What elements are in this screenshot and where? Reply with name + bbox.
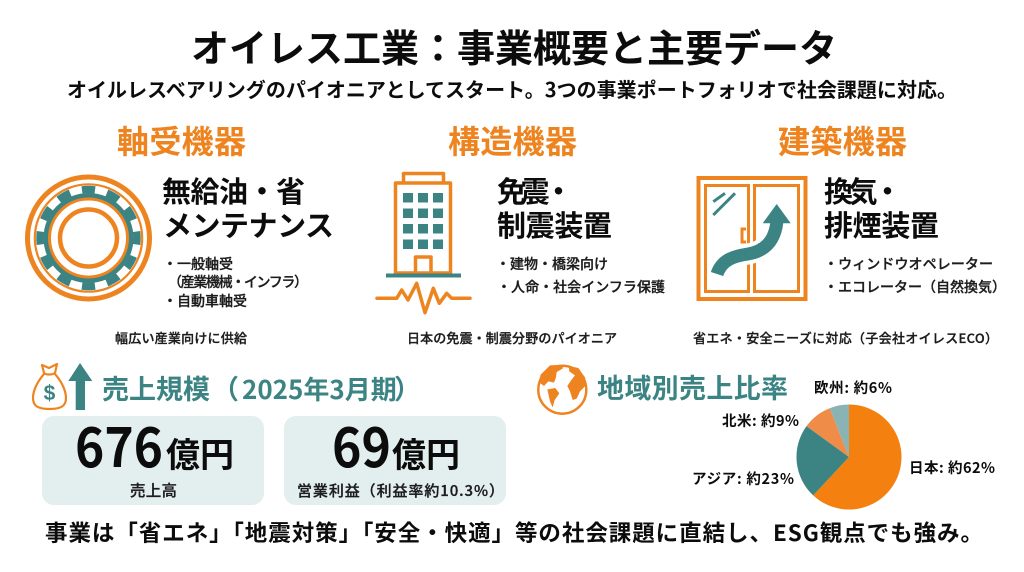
label: Europe: 欧州: 約6% bbox=[814, 377, 892, 398]
icon: money bag and up arrow: $ bbox=[44, 382, 56, 405]
subheading: oil-free, low maintenance: 無給油・省 bbox=[162, 169, 305, 211]
label: North America: 北米: 約9% bbox=[722, 410, 799, 431]
heading: sales by region: 地域別売上比率 bbox=[597, 367, 788, 406]
heading: bearing equipment: 軸受機器 bbox=[117, 117, 246, 163]
value: revenue: 676 bbox=[75, 404, 163, 483]
bullet list bbox=[163, 254, 308, 311]
value: operating profit: 億円 bbox=[392, 428, 460, 477]
pie chart bbox=[796, 404, 902, 510]
icon: money bag and up arrow bbox=[33, 363, 92, 410]
label: Japan: 日本: 約62% bbox=[909, 457, 995, 478]
value: operating profit: 69 bbox=[332, 404, 391, 483]
heading: structural equipment: 構造機器 bbox=[448, 117, 577, 163]
caption: 幅広い産業向けに供給 bbox=[115, 328, 247, 347]
panel: bearing equipment bbox=[28, 117, 334, 347]
icon: window with airflow arrow bbox=[698, 178, 806, 299]
bullet list: （産業機械・インフラ） bbox=[168, 272, 308, 292]
panel: structural equipment bbox=[377, 117, 665, 347]
subtitle: オイルレスベアリングのパイオニアとしてスタート。3つの事業ポートフォリオで社会課題に対応。 bbox=[67, 74, 957, 103]
panel: bearing equipment: メンテナンス bbox=[163, 203, 334, 245]
label: revenue: 売上高 bbox=[130, 479, 177, 501]
bullet list: ・エコレーター（自然換気） bbox=[824, 277, 1006, 297]
heading: sales scale: （ bbox=[212, 368, 239, 407]
value: operating profit bbox=[332, 404, 460, 483]
heading: sales scale: 2025年3月期 bbox=[242, 370, 397, 407]
bullet list: ・人命・社会インフラ保護 bbox=[497, 277, 665, 297]
icon: building on seismic wave bbox=[377, 174, 470, 313]
conclusion text: 事業は「省エネ」「地震対策」「安全・快適」等の社会課題に直結し、ESG観点でも強み。 bbox=[45, 516, 983, 548]
card: operating profit bbox=[284, 404, 506, 505]
icon: globe bbox=[538, 365, 587, 414]
label: operating profit: 営業利益（利益率約10.3%） bbox=[297, 480, 504, 501]
heading: sales scale: ） bbox=[394, 368, 421, 407]
card: revenue bbox=[42, 404, 264, 505]
bullet list: ・自動車軸受 bbox=[163, 291, 247, 311]
label: Asia: アジア: 約23% bbox=[692, 468, 794, 489]
panel: architectural equipment: 排煙装置 bbox=[824, 203, 939, 245]
caption: 日本の免震・制震分野のパイオニア bbox=[407, 328, 617, 347]
icon: bearing gear bbox=[28, 177, 150, 299]
heading: architectural equipment: 建築機器 bbox=[778, 117, 907, 163]
subheading: seismic isolation and control devices: 免震・ bbox=[497, 169, 573, 211]
caption: 省エネ・安全ニーズに対応（子会社オイレスECO） bbox=[693, 328, 998, 347]
panel: structural equipment: 制震装置 bbox=[497, 203, 612, 245]
value: revenue bbox=[75, 404, 234, 483]
panel: architectural equipment bbox=[693, 117, 1006, 347]
value: revenue: 億円 bbox=[166, 428, 234, 477]
title: オイレス工業：事業概要と主要データ bbox=[191, 18, 837, 73]
bullet list bbox=[824, 254, 1006, 297]
panel: sales scale bbox=[33, 363, 506, 505]
bullet list bbox=[496, 254, 665, 297]
panel: sales by region bbox=[538, 365, 995, 510]
bullet list: ・建物・橋梁向け bbox=[496, 254, 608, 274]
heading: sales scale: 売上規模 bbox=[102, 368, 210, 407]
bullet list: ・ウィンドウオペレーター bbox=[824, 254, 993, 274]
bullet list: ・一般軸受 bbox=[163, 254, 233, 274]
subheading: ventilation and smoke exhaust devices: 換気・ bbox=[824, 169, 902, 211]
